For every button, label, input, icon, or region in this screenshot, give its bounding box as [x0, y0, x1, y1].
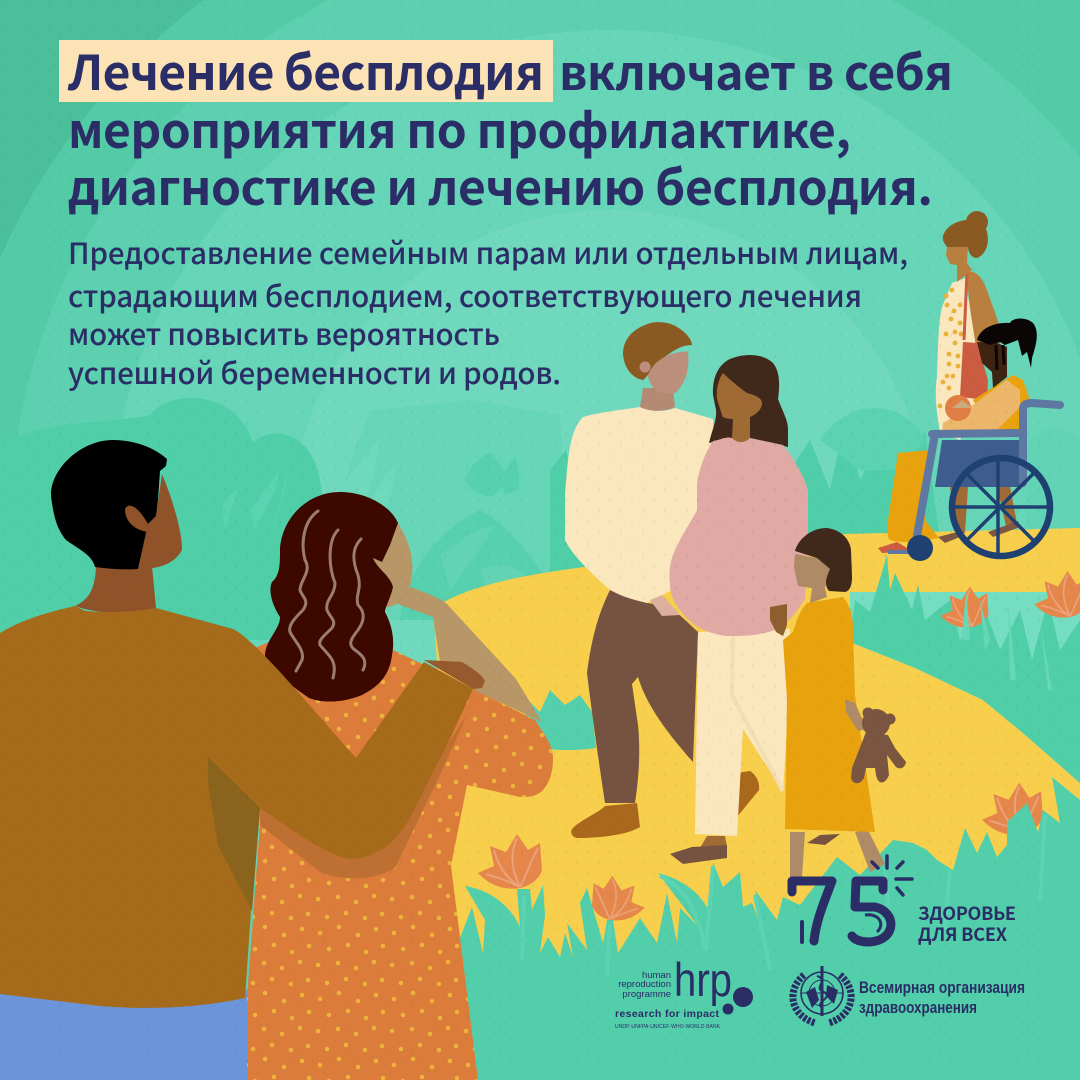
logo: 75 health for all: ЗДОРОВЬЕ: [918, 900, 1016, 926]
body paragraph: Предоставление семейным парам или отдельным лицам,: [68, 231, 908, 273]
logo: hrp: UNDP·UNFPA·UNICEF·WHO·WORLD BANK: [615, 1024, 721, 1030]
body paragraph: успешной беременности и родов.: [68, 351, 561, 393]
wheel: [952, 458, 1050, 556]
person: man in brown sweater seen from behind: [0, 440, 250, 1080]
foreground grass: [452, 777, 1080, 1080]
title with highlight: диагностике и лечению бесплодия.: [68, 149, 933, 219]
person: woman in wheelchair: [878, 318, 1060, 561]
title with highlight: Лечение бесплодия: [67, 34, 544, 104]
logo: World Health Organization: здравоохранения: [859, 998, 977, 1017]
person: woman in orange dress seen from behind: [247, 492, 553, 1080]
flower: bottom left: [478, 834, 542, 889]
yellow winding path: [433, 528, 1080, 1080]
person: standing woman with bag: [936, 211, 1020, 543]
background foliage: [0, 398, 1080, 640]
logo: hrp: programme: [622, 989, 671, 1000]
man's arm around woman: [0, 606, 485, 1008]
logo: 75 health for all: [792, 856, 1016, 947]
logo: hrp: [615, 953, 753, 1030]
title with highlight: включает в себя: [559, 34, 953, 104]
logo: hrp: reproduction: [618, 979, 671, 990]
logo: hrp: human: [642, 970, 671, 981]
flower: bottom centre: [592, 876, 644, 921]
wheelchair seat: [935, 440, 1025, 487]
title with highlight: [59, 34, 953, 219]
logo: World Health Organization: [793, 966, 1025, 1023]
flower: right meadow edge: [1034, 571, 1080, 618]
logo: 75 health for all: ДЛЯ ВСЕХ: [918, 921, 1008, 947]
body paragraph: страдающим бесплодием, соответствующего лечения: [68, 274, 862, 316]
meadow blades over flowers: [962, 590, 1052, 690]
person: pregnant woman: [669, 355, 808, 864]
logo: hrp: hrp: [674, 953, 732, 1006]
teddy bear: [851, 708, 906, 783]
flower: right meadow left: [940, 586, 988, 627]
body paragraph: [68, 231, 908, 393]
right meadow with grass: [850, 555, 1080, 783]
body paragraph: может повысить вероятность: [68, 312, 500, 354]
person: child with teddy bear: [770, 528, 906, 877]
title with highlight: мероприятия по профилактике,: [68, 92, 851, 162]
logo: World Health Organization: Всемирная организация: [859, 978, 1025, 997]
logo: hrp: research for impact: [615, 1008, 720, 1020]
flower: path right: [982, 783, 1043, 835]
person: man in cream sweater: [565, 322, 759, 838]
